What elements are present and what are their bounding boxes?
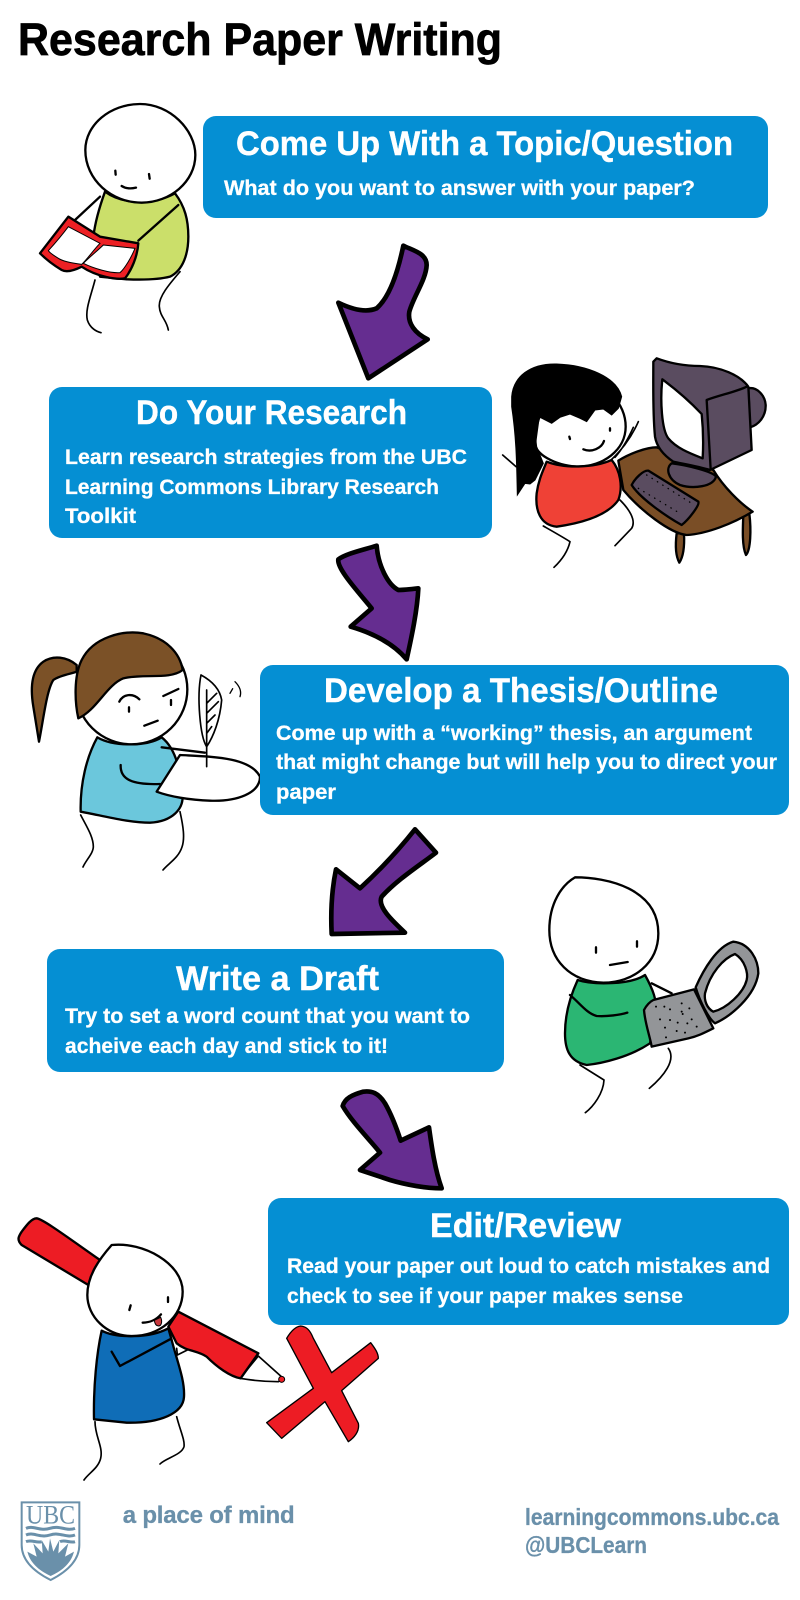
tagline: a place of mind bbox=[123, 1502, 295, 1529]
illustration: person writing with a quill bbox=[32, 633, 260, 870]
monitor edge bbox=[707, 387, 747, 469]
panel: write a draft bbox=[47, 949, 504, 1072]
blue shirt bbox=[94, 1328, 184, 1423]
legs bbox=[87, 272, 180, 333]
legs bbox=[543, 500, 633, 567]
body text line 3: Toolkit bbox=[65, 504, 136, 528]
tip dot bbox=[279, 1376, 285, 1382]
red book bbox=[40, 217, 138, 279]
laptop bbox=[644, 942, 758, 1047]
body text line 3: paper bbox=[276, 780, 337, 804]
head bbox=[535, 383, 626, 467]
panel background bbox=[203, 116, 768, 218]
monitor stand bbox=[668, 463, 716, 487]
waves bbox=[26, 1527, 75, 1542]
monitor back bbox=[748, 388, 766, 427]
pencil front bbox=[168, 1312, 258, 1378]
panel: come up with a topic bbox=[203, 116, 768, 218]
red x bbox=[267, 1326, 378, 1442]
footer website: learningcommons.ubc.ca bbox=[525, 1504, 779, 1530]
hair bbox=[76, 633, 183, 718]
body text line 2: that might change but will help you to direct your bbox=[276, 750, 778, 774]
right page bbox=[83, 245, 135, 273]
arrow 1 bbox=[338, 246, 428, 378]
footer twitter handle: @UBCLearn bbox=[525, 1532, 647, 1558]
arm lines bbox=[121, 747, 205, 784]
panel background bbox=[260, 665, 789, 815]
face bbox=[569, 428, 610, 450]
body text: Try to set a word count that you want to bbox=[65, 1004, 470, 1028]
heading: Do Your Research bbox=[136, 394, 407, 432]
ponytail bbox=[32, 658, 77, 742]
legs bbox=[580, 1048, 671, 1113]
illustration: person editing with a giant red pencil bbox=[19, 1218, 378, 1480]
head bbox=[87, 1245, 183, 1336]
keyboard bbox=[632, 471, 698, 525]
face bbox=[115, 171, 150, 188]
blue shirt bbox=[81, 737, 183, 823]
left arm bbox=[75, 197, 100, 220]
head bbox=[549, 877, 658, 983]
arrow 3 bbox=[331, 829, 436, 934]
panel background bbox=[268, 1198, 789, 1325]
body text: Come up with a “working” thesis, an argument bbox=[276, 721, 752, 745]
logo: UBC crest bbox=[22, 1499, 79, 1580]
arrow 4 bbox=[343, 1091, 442, 1188]
tongue bbox=[154, 1317, 162, 1326]
pencil tip bbox=[240, 1356, 283, 1382]
arm bbox=[570, 995, 627, 1016]
keyboard keys bbox=[638, 475, 692, 513]
quill bbox=[199, 675, 222, 747]
arms bbox=[503, 422, 638, 467]
illustration: person with a laptop bbox=[549, 877, 758, 1113]
panel: develop a thesis bbox=[260, 665, 789, 815]
legs bbox=[81, 812, 184, 870]
arrow 2 bbox=[338, 546, 418, 659]
panel background bbox=[49, 387, 492, 538]
body bbox=[549, 877, 672, 1113]
heading: Develop a Thesis/Outline bbox=[324, 672, 718, 710]
desk legs bbox=[676, 513, 750, 563]
body text line 2: check to see if your paper makes sense bbox=[287, 1284, 683, 1308]
body text: What do you want to answer with your paper? bbox=[224, 176, 695, 200]
body text line 2: Learning Commons Library Research bbox=[65, 475, 439, 499]
face bbox=[129, 1297, 168, 1323]
monitor body bbox=[653, 358, 752, 470]
red shirt bbox=[536, 460, 621, 527]
face bbox=[119, 689, 178, 726]
body text: Learn research strategies from the UBC bbox=[65, 445, 467, 469]
heading: Come Up With a Topic/Question bbox=[236, 125, 733, 163]
screen bbox=[705, 954, 747, 1012]
sunburst bbox=[27, 1538, 74, 1576]
right arm bbox=[138, 205, 178, 241]
monitor screen bbox=[661, 379, 703, 458]
arm behind bbox=[652, 983, 672, 993]
heading: Write a Draft bbox=[176, 960, 379, 998]
green shirt bbox=[93, 192, 188, 280]
legs bbox=[84, 1417, 184, 1480]
motion ticks bbox=[230, 682, 241, 697]
arm behind bbox=[177, 1348, 187, 1355]
keys bbox=[656, 1003, 697, 1037]
pencil back bbox=[19, 1218, 100, 1285]
face bbox=[596, 941, 637, 965]
shield outline bbox=[22, 1502, 79, 1580]
arm line bbox=[112, 1339, 170, 1366]
quill shaft and barbs bbox=[207, 690, 218, 767]
body text line 2: acheive each day and stick to it! bbox=[65, 1034, 388, 1058]
panel: edit and review bbox=[268, 1198, 789, 1325]
green shirt bbox=[565, 975, 657, 1065]
left page bbox=[48, 227, 100, 264]
panel: do your research bbox=[49, 387, 492, 538]
desk top bbox=[618, 447, 753, 535]
hair bbox=[512, 364, 622, 495]
body text: Read your paper out loud to catch mistakes and bbox=[287, 1254, 770, 1278]
title: Research Paper Writing bbox=[18, 14, 502, 65]
lid bbox=[696, 942, 758, 1023]
heading: Edit/Review bbox=[430, 1207, 622, 1245]
illustration: person at a computer desk bbox=[503, 358, 766, 567]
base bbox=[644, 989, 713, 1047]
illustration: person reading a book bbox=[40, 104, 195, 333]
head bbox=[76, 634, 187, 744]
paper and hand bbox=[157, 755, 260, 801]
UBC letters: UBC bbox=[26, 1499, 75, 1529]
panel background bbox=[47, 949, 504, 1072]
head bbox=[85, 104, 195, 203]
